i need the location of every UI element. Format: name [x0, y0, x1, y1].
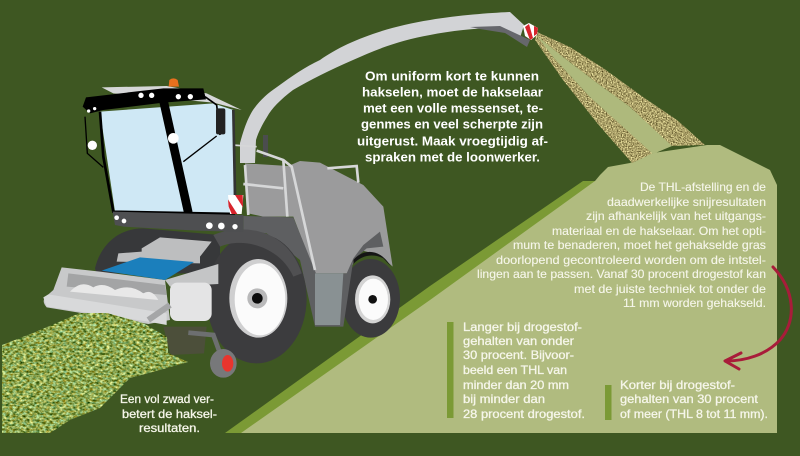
text: swath note: [120, 393, 217, 435]
field slope edge: [225, 181, 600, 433]
text: THL settings: mum te benaderen, moet het gehakselde gras: [513, 239, 766, 252]
text: chute note: Om uniform kort te kunnen: [365, 70, 539, 84]
text: shorter: Korter bij drogestof-: [620, 379, 735, 392]
text: THL settings: met de juiste techniek tot onder de: [574, 283, 766, 296]
front wheel: [207, 229, 307, 363]
text: swath note: betert de haksel-: [122, 408, 217, 421]
far front tire: [95, 228, 220, 273]
text: THL settings: [477, 181, 766, 310]
red arrow: [725, 267, 791, 369]
marker bar: longer: [447, 322, 454, 418]
cab roof: [102, 86, 242, 110]
text: chute note: spraken met de loonwerker.: [365, 150, 540, 164]
header: [43, 264, 218, 325]
front band: [113, 212, 243, 232]
text: THL settings: doorlopend gecontroleerd worden om de intstel-: [496, 254, 766, 267]
text: THL settings: materiaal en de hakselaar. Om het opti-: [552, 225, 766, 238]
gauge wheel: [188, 333, 237, 378]
spray of chopped grass: [535, 32, 705, 163]
engine cover: [117, 237, 212, 263]
text: longer: 28 procent drogestof.: [463, 408, 585, 421]
side panel: [243, 216, 383, 327]
text: chute note: uitgerust. Maak vroegtijdig af-: [357, 134, 548, 148]
text: THL settings: zijn afhankelijk van het uitgangs-: [586, 210, 766, 223]
text: longer: gehalten van onder: [463, 335, 574, 348]
text: longer: 30 procent. Bijvoor-: [463, 349, 574, 362]
text: chute note: genmes en veel scherpte zijn: [361, 118, 543, 132]
text: longer: beeld een THL van: [463, 364, 567, 377]
text: longer: bij minder dan: [463, 393, 545, 406]
text: chute note: [357, 70, 548, 164]
text: shorter: of meer (THL 8 tot 11 mm).: [620, 408, 768, 421]
marker bar: shorter: [605, 385, 612, 420]
beacon: [169, 78, 179, 87]
rear body: [245, 161, 393, 273]
text: THL settings: daadwerkelijke snijresultaten: [607, 196, 766, 209]
text: shorter: [620, 379, 768, 421]
warning plate: [228, 195, 243, 214]
railings: [197, 145, 358, 270]
field with hill: [241, 145, 777, 433]
text: longer: minder dan 20 mm: [463, 379, 569, 392]
rear wheel: [341, 259, 400, 338]
chute nozzle: [523, 23, 538, 40]
lower housing: [315, 273, 343, 325]
band lights: [114, 215, 238, 229]
text: swath note: Een vol zwad ver-: [120, 393, 214, 406]
grass swath: [2, 313, 188, 433]
cab frame: [85, 97, 235, 214]
text: THL settings: lingen aan te passen. Vanaf 30 procent drogestof kan: [477, 268, 766, 281]
work lights: [87, 93, 193, 150]
mirror: [216, 108, 225, 134]
roof bar: [83, 88, 206, 113]
cab window: [100, 103, 235, 213]
text: chute note: met een volle messenset, te-: [363, 102, 543, 116]
blue panel: [102, 257, 194, 280]
text: THL settings: 11 mm worden gehakseld.: [623, 297, 766, 310]
text: chute note: hakselen, moet de hakselaar: [362, 86, 543, 100]
text: longer: Langer bij drogestof-: [463, 321, 582, 334]
text: longer: [463, 321, 585, 421]
fender arch: [353, 252, 391, 266]
text: THL settings: De THL-afstelling en de: [640, 181, 766, 194]
text: shorter: gehalten van 30 procent: [620, 393, 759, 406]
ground shadow: [163, 327, 207, 355]
chute: [240, 12, 530, 163]
text: swath note: resultaten.: [139, 422, 200, 435]
forage harvester: [43, 78, 400, 378]
